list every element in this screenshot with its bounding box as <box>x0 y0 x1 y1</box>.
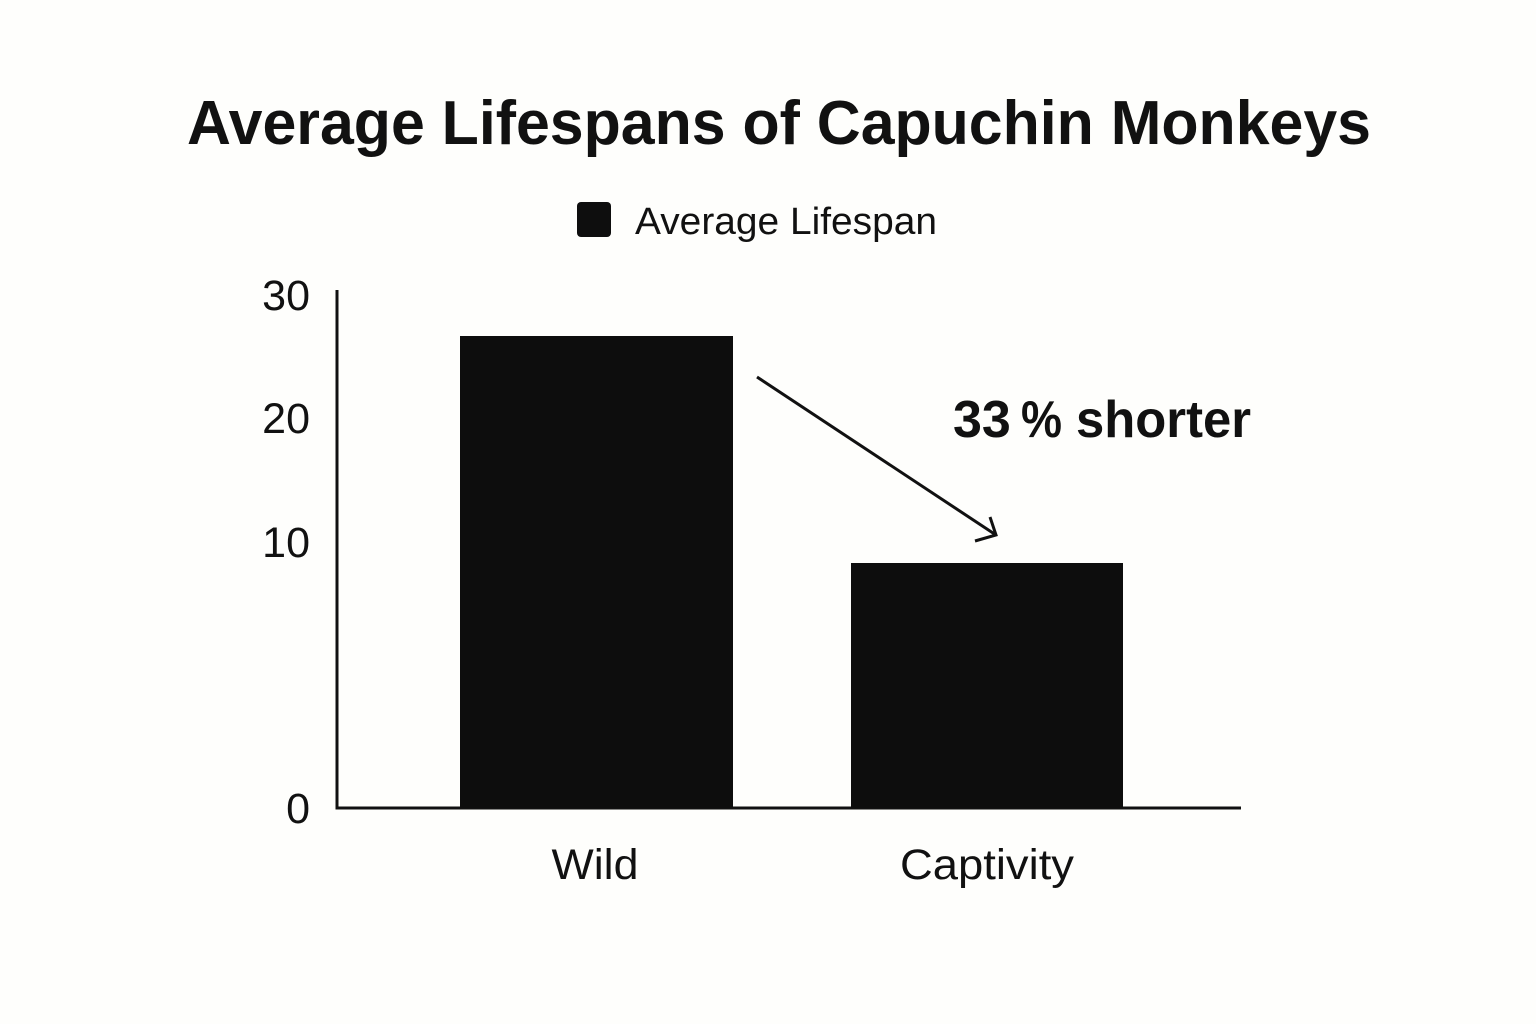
y axis labels: 30 <box>262 272 310 320</box>
y axis labels: 0 <box>286 785 310 833</box>
x axis labels: Wild <box>552 841 638 889</box>
x axis labels: Captivity <box>900 841 1075 889</box>
legend swatch <box>577 202 611 237</box>
callout <box>953 391 1251 449</box>
title: Average Lifespans of Capuchin Monkeys <box>187 89 1371 158</box>
axes <box>337 290 1241 808</box>
callout: % <box>1021 391 1062 449</box>
legend <box>577 201 937 243</box>
legend label: Average Lifespan <box>635 201 937 243</box>
arrow <box>757 377 996 541</box>
bar: captivity <box>851 563 1123 808</box>
y axis labels: 20 <box>262 395 310 443</box>
callout: shorter <box>1076 391 1251 449</box>
bar: wild <box>460 336 733 808</box>
callout: 33 <box>953 391 1011 449</box>
x axis labels <box>552 841 1075 889</box>
y axis labels <box>262 272 310 833</box>
y axis labels: 10 <box>262 519 310 567</box>
